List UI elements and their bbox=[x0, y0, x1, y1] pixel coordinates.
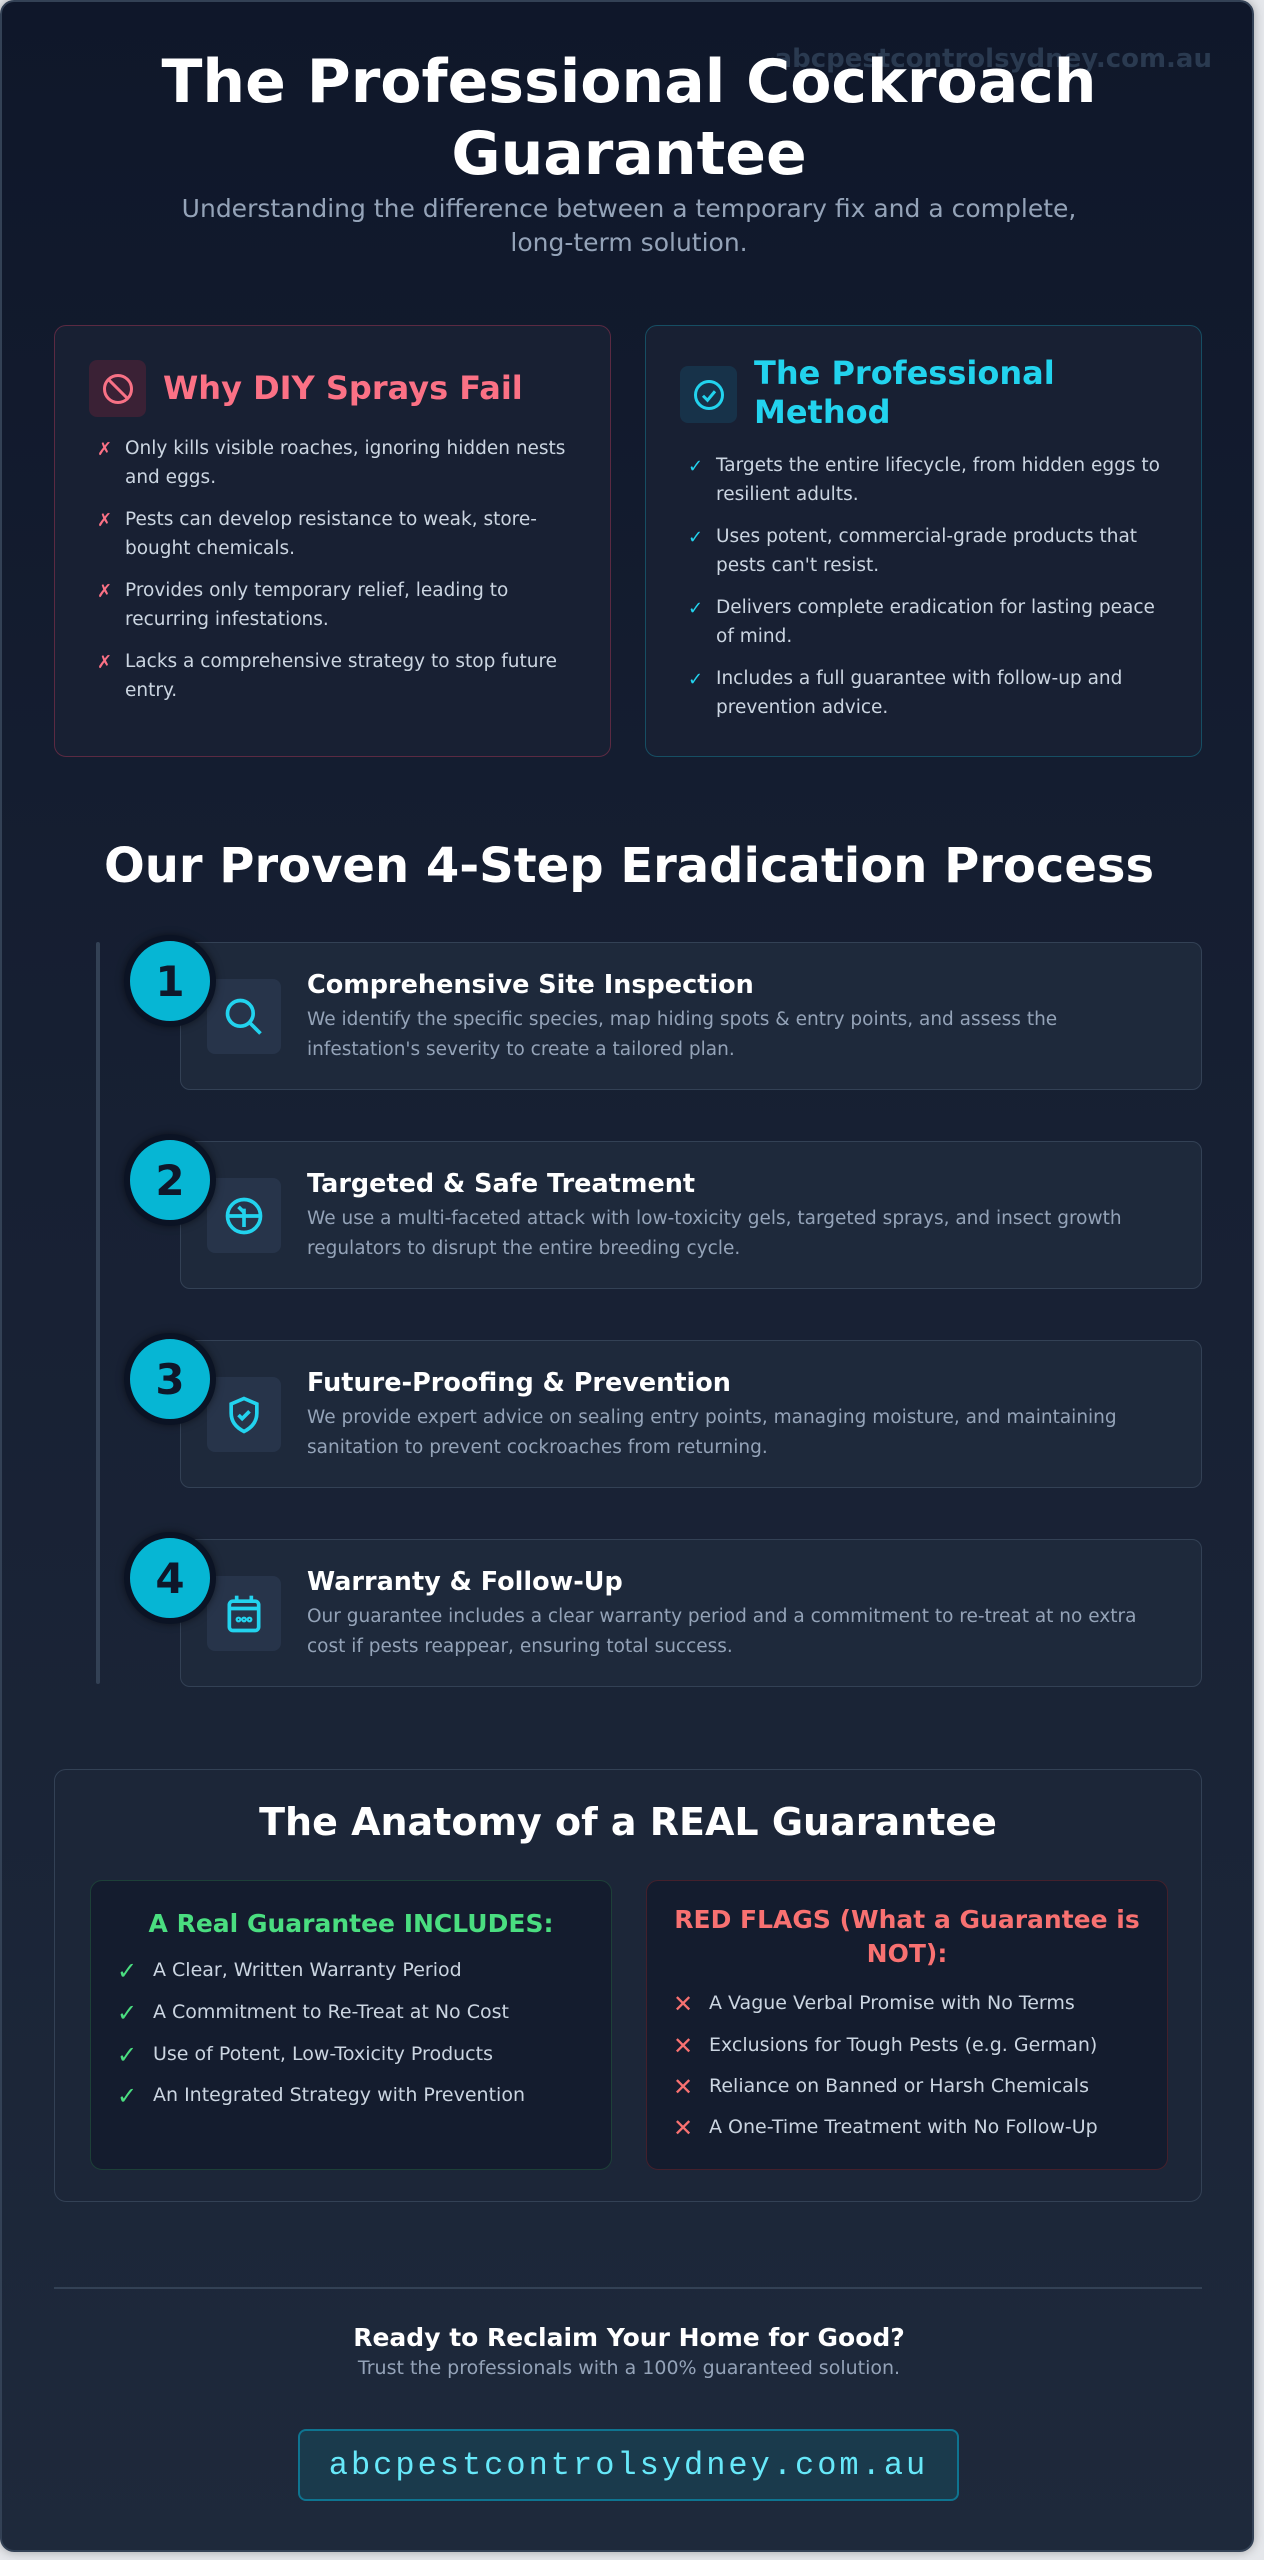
badge 1: 1 bbox=[155, 956, 185, 1006]
includes list bbox=[117, 1957, 525, 2110]
step 3 text: We provide expert advice on sealing entry points, managing moisture, and maintaining sanitation to prevent cockroaches from returning. bbox=[307, 1407, 1117, 1458]
box: includes: ✓ bbox=[117, 2082, 137, 2110]
step 1 text: We identify the specific species, map hiding spots & entry points, and assess the infestation's severity to create a tailored plan. bbox=[307, 1009, 1057, 1060]
box: red flags: Reliance on Banned or Harsh Chemicals bbox=[709, 2075, 1089, 2097]
red flags heading: RED FLAGS (What a Guarantee is NOT): bbox=[674, 1905, 1140, 1968]
URL button bbox=[298, 2429, 959, 2501]
box: includes: ✓ bbox=[117, 2041, 137, 2069]
box: includes: ✓ bbox=[117, 1999, 137, 2027]
box: red flags: ✕ bbox=[673, 2032, 693, 2060]
includes heading: A Real Guarantee INCLUDES: bbox=[149, 1909, 553, 1938]
icon: treatment bbox=[207, 1178, 281, 1253]
panel: why DIY sprays fail bbox=[54, 325, 611, 757]
step 2 text: We use a multi-faceted attack with low-toxicity gels, targeted sprays, and insect growth regulators to disrupt the entire breeding cycle. bbox=[307, 1208, 1122, 1259]
box: red flags: ✕ bbox=[673, 2073, 693, 2101]
panel: professional method: ✓ bbox=[688, 669, 703, 690]
icon: calendar bbox=[207, 1576, 281, 1651]
heading: professional: The Professional bbox=[754, 354, 1055, 392]
icon: search bbox=[207, 979, 281, 1054]
list: DIY failures bbox=[97, 438, 565, 701]
box: red flags: ✕ bbox=[673, 2114, 693, 2142]
watermark: abcpestcontrolsydney.com.au bbox=[775, 44, 1212, 74]
panel: why DIY sprays fail: ✗ bbox=[97, 581, 112, 602]
panel: professional method: Uses potent, commercial-grade products that pests can't resist. bbox=[716, 526, 1137, 576]
heading: 4-step process: Our Proven 4-Step Eradication Process bbox=[104, 838, 1154, 894]
badge 2: 2 bbox=[155, 1156, 185, 1204]
CTA subtext: Trust the professionals with a 100% guaranteed solution. bbox=[358, 2357, 900, 2379]
red flags list bbox=[673, 1990, 1098, 2142]
panel: professional method: Delivers complete eradication for lasting peace of mind. bbox=[716, 597, 1155, 647]
icon: check circle bbox=[680, 366, 737, 423]
badge 2 bbox=[124, 1134, 216, 1226]
box: includes: ✓ bbox=[117, 1957, 137, 1985]
box: includes bbox=[90, 1880, 612, 2170]
panel: anatomy of a real guarantee bbox=[54, 1769, 1202, 2202]
panel: why DIY sprays fail: Provides only temporary relief, leading to recurring infestations. bbox=[125, 580, 508, 630]
panel: why DIY sprays fail: Pests can develop resistance to weak, store-bought chemicals. bbox=[125, 509, 537, 559]
panel: professional method: ✓ bbox=[688, 456, 703, 477]
panel: professional method: ✓ bbox=[688, 527, 703, 548]
step 4 bbox=[180, 1539, 1202, 1687]
box: includes: An Integrated Strategy with Prevention bbox=[153, 2084, 525, 2106]
step 2 bbox=[180, 1141, 1202, 1289]
badge 4: 4 bbox=[155, 1554, 185, 1602]
step 4 title: Warranty & Follow-Up bbox=[307, 1567, 623, 1597]
box: red flags bbox=[646, 1880, 1168, 2170]
URL button: abcpestcontrolsydney.com.au bbox=[329, 2446, 928, 2484]
title: Guarantee bbox=[451, 119, 807, 189]
step 1 bbox=[180, 942, 1202, 1090]
box: red flags: Exclusions for Tough Pests (e.g. German) bbox=[709, 2034, 1097, 2056]
anatomy heading: The Anatomy of a REAL Guarantee bbox=[259, 1800, 997, 1844]
panel: why DIY sprays fail: Only kills visible roaches, ignoring hidden nests and eggs. bbox=[125, 438, 565, 488]
panel: professional method: Includes a full guarantee with follow-up and prevention advice. bbox=[716, 668, 1122, 718]
icon: shield bbox=[207, 1377, 281, 1452]
box: includes: A Clear, Written Warranty Period bbox=[153, 1959, 462, 1981]
step 3 bbox=[180, 1340, 1202, 1488]
panel: why DIY sprays fail: ✗ bbox=[97, 652, 112, 673]
panel: why DIY sprays fail: Lacks a comprehensive strategy to stop future entry. bbox=[125, 651, 557, 701]
panel: why DIY sprays fail: ✗ bbox=[97, 439, 112, 460]
icon: prohibited bbox=[89, 360, 146, 417]
box: includes: A Commitment to Re-Treat at No Cost bbox=[153, 2001, 509, 2023]
badge 1 bbox=[124, 935, 216, 1027]
badge 4 bbox=[124, 1532, 216, 1624]
title bbox=[162, 47, 1096, 189]
box: includes: Use of Potent, Low-Toxicity Products bbox=[153, 2043, 493, 2065]
badge 3 bbox=[124, 1333, 216, 1425]
box: red flags: A Vague Verbal Promise with No Terms bbox=[709, 1992, 1075, 2014]
CTA heading: Ready to Reclaim Your Home for Good? bbox=[353, 2323, 905, 2352]
title: The Professional Cockroach bbox=[162, 47, 1096, 117]
box: red flags: A One-Time Treatment with No Follow-Up bbox=[709, 2116, 1098, 2138]
badge 3: 3 bbox=[155, 1354, 185, 1404]
heading: why DIY: Why DIY Sprays Fail bbox=[163, 369, 523, 407]
step 4 text: Our guarantee includes a clear warranty period and a commitment to re-treat at no extra cost if pests reappear, ensuring total success. bbox=[307, 1606, 1136, 1657]
panel: why DIY sprays fail: ✗ bbox=[97, 510, 112, 531]
step 1 title: Comprehensive Site Inspection bbox=[307, 970, 754, 1000]
step 3 title: Future-Proofing & Prevention bbox=[307, 1368, 731, 1398]
box: red flags: ✕ bbox=[673, 1990, 693, 2018]
subtitle: Understanding the difference between a temporary fix and a complete, long-term solution. bbox=[182, 194, 1076, 257]
panel: professional method: ✓ bbox=[688, 598, 703, 619]
heading: professional: Method bbox=[754, 393, 891, 431]
panel: professional method bbox=[645, 325, 1202, 757]
panel: professional method: Targets the entire lifecycle, from hidden eggs to resilient adults. bbox=[716, 455, 1160, 505]
heading: professional bbox=[754, 354, 1055, 431]
list: professional benefits bbox=[688, 455, 1160, 718]
step 2 title: Targeted & Safe Treatment bbox=[307, 1169, 695, 1199]
